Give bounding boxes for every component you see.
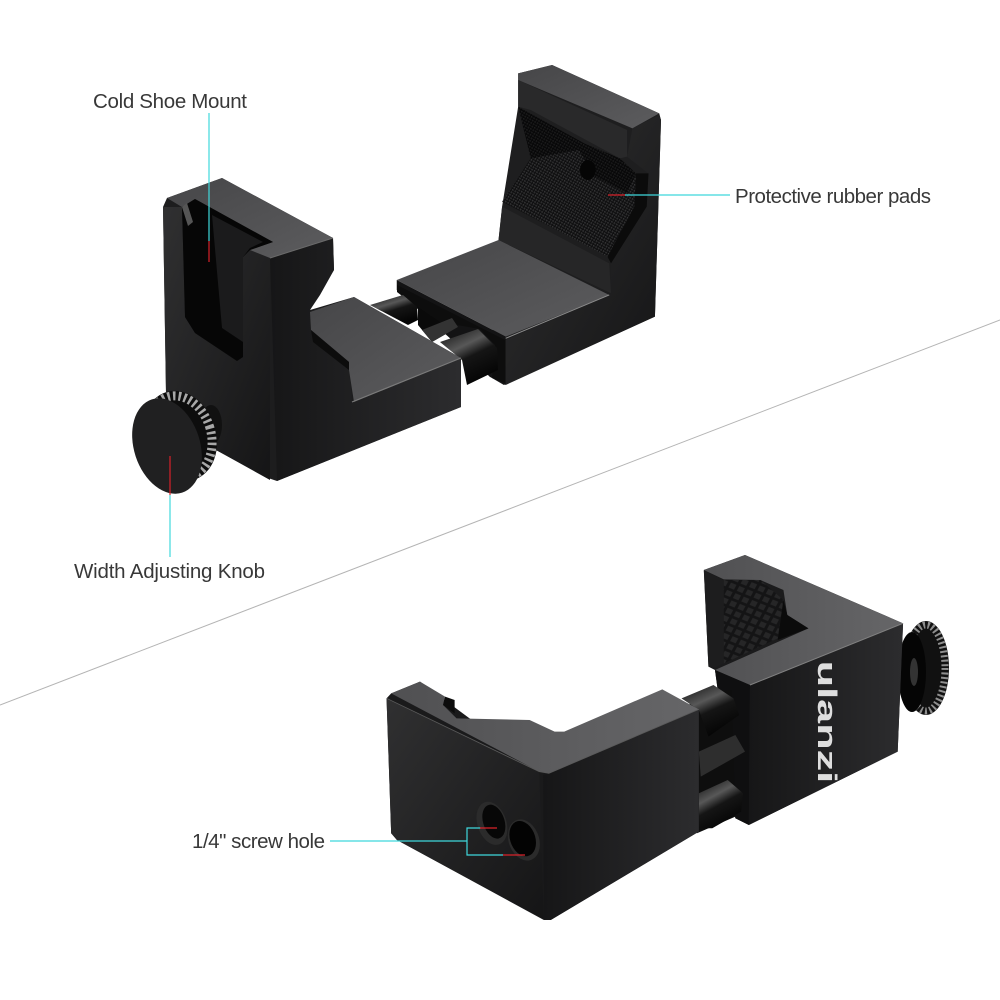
label: 1/4" screw hole [192,828,525,855]
screw holes [472,799,545,864]
label: Protective rubber pads: Protective rubber pads [735,185,931,208]
label: 1/4" screw hole: 1/4" screw hole [192,830,325,853]
cold shoe slot [182,199,273,361]
rear knob [898,621,949,715]
label: Width Adjusting Knob: Width Adjusting Knob [74,560,265,583]
knob [120,381,228,503]
rods and screw [682,685,745,833]
right jaw [397,65,661,385]
left jaw body [163,178,461,481]
product: clamp top view [120,65,661,503]
rods and screw [370,285,505,385]
label: Cold Shoe Mount: Cold Shoe Mount [93,90,247,113]
rear block [704,555,903,825]
logo: ulanzi: ulanzi [812,661,843,783]
product: clamp bottom view [387,555,949,920]
diagonal divider line [0,320,1000,705]
front block [387,682,699,920]
